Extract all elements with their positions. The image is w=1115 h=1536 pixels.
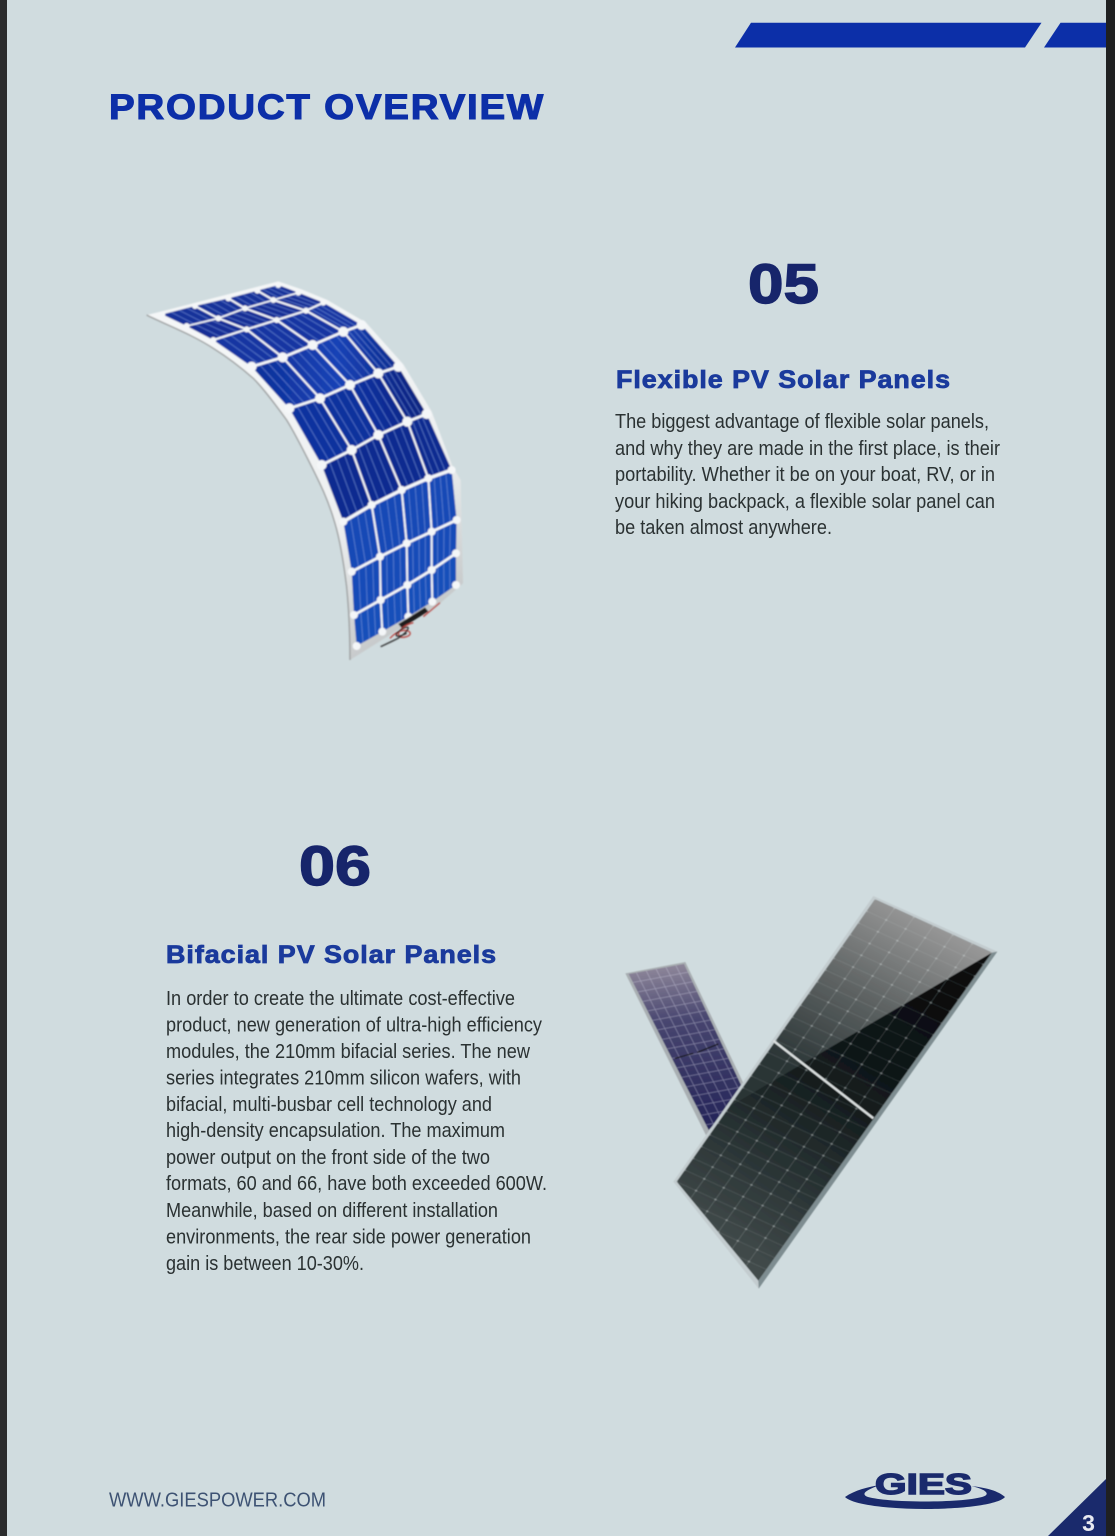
text block: flexible panels: your hiking backpack, a flexible solar panel can: [615, 490, 995, 513]
text block: flexible panels: and why they are made in the first place, is their: [615, 437, 1000, 460]
text block: bifacial panels: gain is between 10-30%.: [166, 1252, 364, 1275]
text block: bifacial panels: power output on the front side of the two: [166, 1146, 490, 1169]
text block: bifacial panels: In order to create the ultimate cost-effective: [166, 987, 515, 1010]
logo: GIES: [845, 1469, 1005, 1509]
cell gaps: [187, 291, 457, 632]
heading: flexible panels: Flexible PV Solar Panels: [616, 366, 951, 394]
text block: flexible panels: [615, 410, 1000, 539]
text block: bifacial panels: series integrates 210mm silicon wafers, with: [166, 1066, 521, 1090]
text block: bifacial panels: Meanwhile, based on different installation: [166, 1199, 498, 1222]
section number 05: 05: [748, 252, 819, 315]
page number corner: 3: [1082, 1510, 1095, 1536]
footer website: WWW.GIESPOWER.COM: [109, 1490, 326, 1512]
illustration: flexible solar panel: [146, 281, 463, 660]
text block: bifacial panels: formats, 60 and 66, have both exceeded 600W.: [166, 1172, 547, 1195]
text block: bifacial panels: product, new generation of ultra-high efficiency: [166, 1014, 543, 1036]
right dark edge: [1106, 0, 1115, 1536]
text block: bifacial panels: environments, the rear side power generation: [166, 1226, 531, 1248]
left dark edge: [0, 0, 7, 1536]
centre junction strip: [773, 1041, 873, 1118]
cell corners: [162, 285, 457, 646]
title: PRODUCT OVERVIEW: [109, 88, 545, 127]
text block: bifacial panels: modules, the 210mm bifacial series. The new: [166, 1040, 530, 1063]
logo: GIES: GIES: [875, 1469, 972, 1501]
front panel: [673, 896, 997, 1289]
text block: flexible panels: be taken almost anywhere.: [615, 516, 832, 539]
junction box and cables: [381, 603, 440, 647]
sheet edge: [147, 315, 350, 660]
illustration: bifacial solar panels: [625, 896, 998, 1288]
rear panel: [625, 962, 748, 1137]
text block: bifacial panels: [166, 987, 547, 1275]
heading: bifacial panels: Bifacial PV Solar Panels: [166, 941, 497, 969]
solar cell rows: [162, 285, 457, 646]
text block: bifacial panels: bifacial, multi-busbar cell technology and: [166, 1093, 492, 1116]
text block: bifacial panels: high-density encapsulation. The maximum: [166, 1119, 505, 1142]
section number 06: 06: [299, 834, 371, 897]
text block: flexible panels: The biggest advantage of flexible solar panels,: [615, 410, 989, 433]
panel sheet: [147, 281, 463, 660]
busbars: [171, 286, 450, 642]
glass reflection: [729, 899, 992, 1107]
text block: flexible panels: portability. Whether it be on your boat, RV, or in: [615, 463, 995, 486]
top header bars: [735, 23, 1106, 48]
page number corner: [1048, 1479, 1106, 1536]
